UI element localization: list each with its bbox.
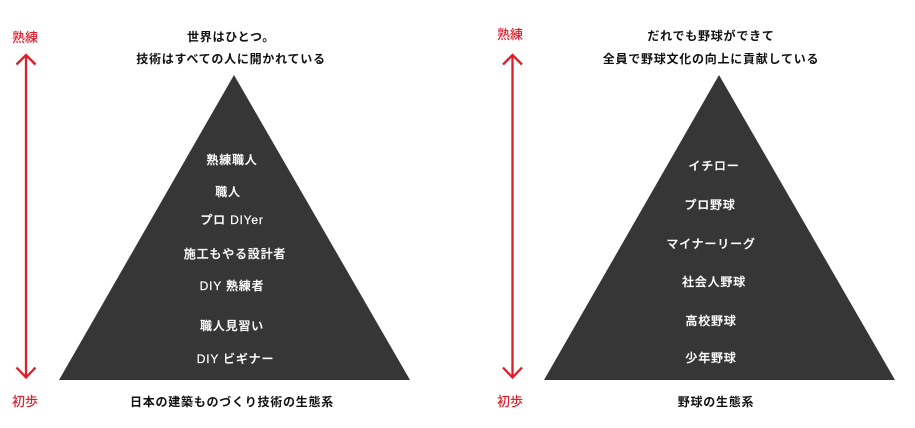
heading: right top: 全員で野球文化の向上に貢献している [603,51,819,66]
skill axis: left [12,30,38,409]
pyramid: left [59,75,410,380]
heading: right top: だれでも野球ができて [647,28,775,43]
pyramid labels: left: 施工もやる設計者 [184,246,286,261]
panel: baseball ecosystem [497,27,895,409]
skill axis: right: 初歩 [497,394,523,409]
pyramid labels: left: DIY 熟練者 [200,278,264,293]
pyramid labels: left: DIY ビギナー [197,352,274,366]
pyramid labels: left [184,152,286,366]
heading: right top [603,28,819,66]
pyramid labels: right: 高校野球 [685,313,737,328]
pyramid labels: right: プロ野球 [684,197,736,212]
heading: left top: 技術はすべての人に開かれている [136,51,326,66]
heading: left top: 世界はひとつ。 [187,30,275,44]
pyramid labels: left: 職人見習い [200,318,264,333]
skill axis: left: 初歩 [12,394,38,409]
caption: right: 野球の生態系 [678,394,754,409]
pyramid labels: right: 少年野球 [685,350,737,365]
heading: left top [136,30,326,66]
pyramid labels: right: 社会人野球 [682,274,746,289]
skill axis: left: 熟練 [12,30,38,45]
pyramid labels: left: 熟練職人 [206,152,258,167]
pyramid labels: left: プロ DIYer [200,213,264,227]
skill axis: right [497,27,523,409]
panel: DIY ecosystem [12,30,410,409]
pyramid labels: right: イチロー [688,159,740,173]
caption: left: 日本の建築ものづくり技術の生態系 [130,394,334,409]
pyramid labels: right [666,159,756,365]
pyramid labels: right: マイナーリーグ [666,236,756,251]
pyramid labels: left: 職人 [215,184,241,199]
pyramid: right [544,75,895,380]
skill axis: right: 熟練 [497,27,523,42]
